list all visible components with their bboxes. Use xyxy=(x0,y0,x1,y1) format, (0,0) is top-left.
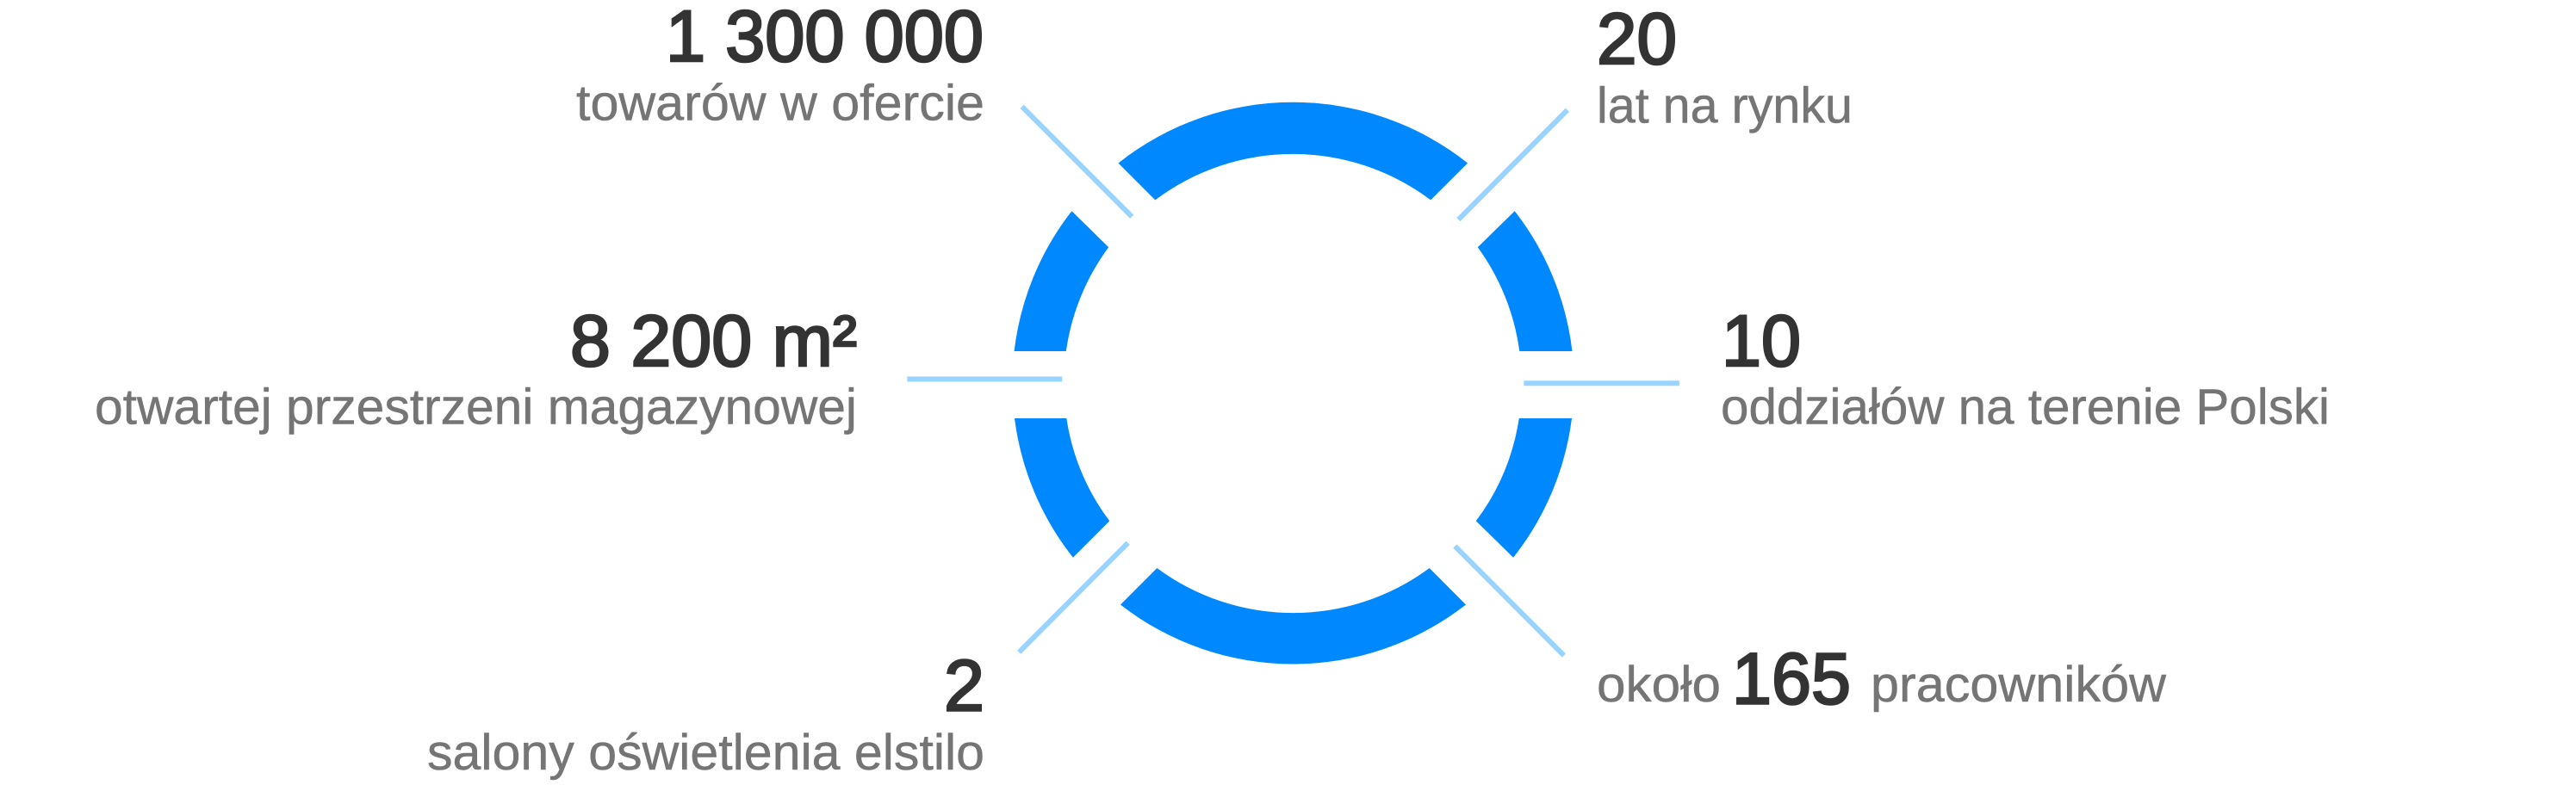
stat: 20 lat na rynku xyxy=(1597,0,1853,133)
caption: lat na rynku xyxy=(1597,77,1853,133)
stat: około 165 pracowników xyxy=(1597,639,2167,720)
stat: 10 oddziałów na terenie Polski xyxy=(1721,300,2330,436)
caption: salony oświetlenia elstilo xyxy=(427,725,984,781)
ring segment: upper left xyxy=(1015,211,1108,351)
segmented blue ring xyxy=(1015,102,1573,664)
number: 20 xyxy=(1597,0,1677,79)
ring segment: top xyxy=(1118,102,1468,200)
prefix: około xyxy=(1597,657,1721,713)
ring segment: lower left xyxy=(1015,418,1109,558)
caption: otwartej przestrzeni magazynowej xyxy=(95,380,857,436)
number: 165 xyxy=(1732,639,1851,720)
stat: 1 300 000 towarów w ofercie xyxy=(576,0,984,131)
connector line: top right xyxy=(1458,110,1567,219)
suffix: pracowników xyxy=(1871,657,2167,713)
stat: 2 salony oświetlenia elstilo xyxy=(427,646,984,781)
ring segment: upper right xyxy=(1478,211,1573,351)
number: 2 xyxy=(944,646,984,726)
number: 10 xyxy=(1722,300,1801,381)
connector line: bottom right xyxy=(1455,546,1564,656)
caption: oddziałów na terenie Polski xyxy=(1721,380,2330,436)
number: 8 200 m² xyxy=(570,300,857,381)
connector line: left xyxy=(907,376,1062,381)
ring segment: lower right xyxy=(1476,418,1572,558)
connector line: bottom left xyxy=(1019,543,1128,652)
caption: towarów w ofercie xyxy=(576,75,984,131)
connector line: right xyxy=(1524,380,1679,386)
ring segment: bottom xyxy=(1120,568,1466,664)
connector line: top left xyxy=(1022,107,1132,217)
stat: 8 200 m² otwartej przestrzeni magazynowej xyxy=(95,300,857,436)
